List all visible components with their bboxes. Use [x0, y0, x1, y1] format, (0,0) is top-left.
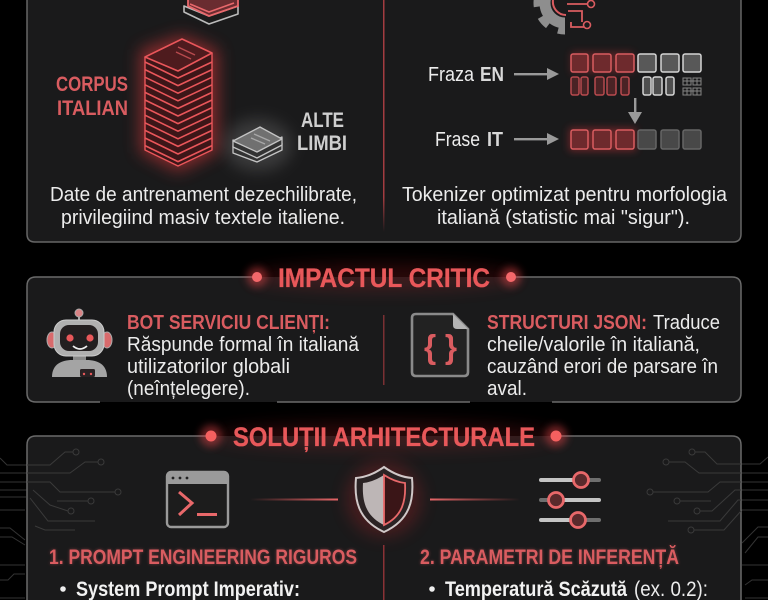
label: fraza EN	[428, 64, 504, 86]
icon: sliders	[539, 472, 601, 528]
text: tokenizer caption: Tokenizer optimizat pentru morfologia	[402, 183, 728, 206]
panel: cauze (top)	[27, 0, 741, 242]
label: alte limbi: LIMBI	[297, 132, 347, 155]
label: alte limbi	[297, 109, 347, 155]
icon: JSON document: { }	[424, 328, 457, 365]
heading: parametri de inferență: 2. PARAMETRI DE INFERENȚĂ	[420, 546, 679, 569]
heading: prompt engineering: 1. PROMPT ENGINEERING RIGUROS	[49, 546, 357, 569]
icon: terminal	[167, 472, 228, 527]
text: structuri JSON: aval.	[487, 377, 527, 400]
heading: impactul critic: IMPACTUL CRITIC	[278, 263, 490, 293]
panel: soluții arhitecturale	[27, 414, 741, 600]
text: bot serviciu clienți: Răspunde formal în italiană	[127, 333, 360, 356]
label: fraza EN: EN	[480, 64, 504, 86]
arrow: down	[628, 98, 642, 124]
text: structuri JSON: cheile/valorile în italiană,	[487, 333, 700, 356]
icon: shield	[346, 461, 422, 537]
token rows: EN	[571, 52, 701, 95]
arrow: EN to tokens	[514, 68, 559, 80]
label: frase IT: IT	[487, 129, 503, 151]
panel: impactul critic	[27, 255, 741, 402]
text: bot serviciu clienți	[127, 311, 360, 400]
icon: tall Italian corpus stack	[140, 35, 218, 172]
label: frase IT: Frase	[435, 129, 480, 151]
text: corpus caption: privilegiind masiv textele italiene.	[61, 206, 345, 229]
text: structuri JSON: Traduce	[653, 311, 720, 334]
connector: terminal to shield	[250, 498, 338, 500]
label: fraza EN: Fraza	[428, 64, 475, 86]
token row: IT	[569, 128, 701, 151]
icon: JSON document	[412, 314, 468, 376]
arrow: IT to tokens	[514, 133, 559, 145]
icon: robot	[47, 309, 112, 377]
icon: small other-languages stack	[224, 119, 292, 171]
text: tokenizer caption: italiană (statistic mai "sigur").	[437, 206, 690, 229]
text: structuri JSON: cauzând erori de parsare în	[487, 355, 718, 378]
text: bot serviciu clienți: BOT SERVICIU CLIENȚI:	[127, 311, 330, 334]
label: alte limbi: ALTE	[301, 109, 344, 132]
connector: shield to sliders	[430, 498, 520, 500]
text: corpus caption	[50, 183, 357, 229]
text: corpus caption: Date de antrenament dezechilibrate,	[50, 183, 357, 206]
label: corpus italian: CORPUS	[56, 73, 128, 96]
label: corpus italian	[56, 73, 128, 120]
background circuit traces: left and right	[0, 452, 768, 598]
text: structuri JSON	[487, 311, 720, 400]
text: bot serviciu clienți: utilizatorilor globali	[127, 355, 290, 378]
icon: book stack top	[184, 0, 238, 24]
label: corpus italian: ITALIAN	[57, 97, 128, 120]
heading: soluții arhitecturale: SOLUȚII ARHITECTURALE	[233, 422, 535, 452]
text: bot serviciu clienți: (neînțelegere).	[127, 377, 250, 400]
text: structuri JSON: STRUCTURI JSON:	[487, 311, 647, 334]
text: tokenizer caption	[402, 183, 728, 229]
icon: gear with circuit	[537, 0, 594, 31]
circuit traces inside panel	[27, 449, 741, 533]
